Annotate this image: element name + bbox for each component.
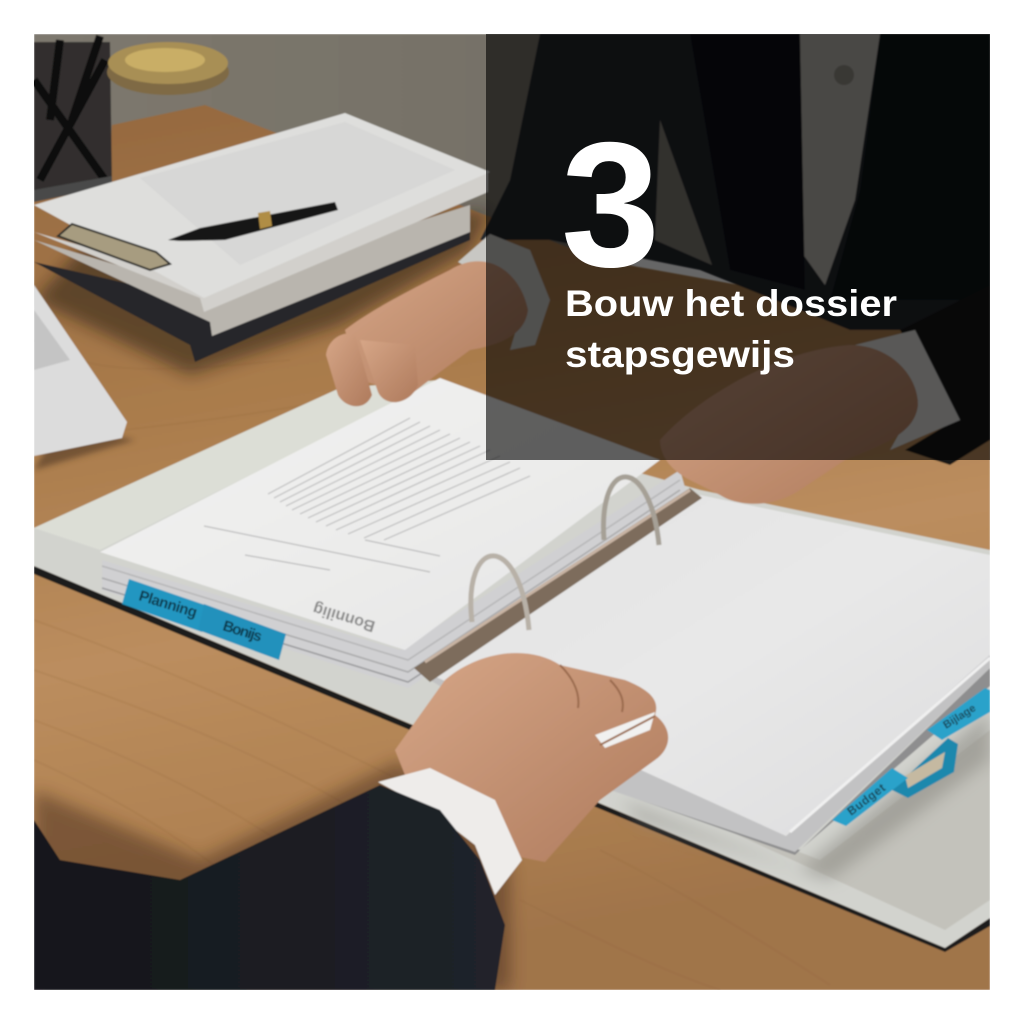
binder ring mechanism (414, 477, 702, 682)
wood grain (718, 990, 720, 991)
tab: Bewijs (198, 604, 286, 660)
lower hand (395, 653, 668, 862)
lower suit sleeve (34, 785, 505, 990)
icon: brass dish (107, 42, 229, 95)
dark overlay panel (486, 34, 990, 460)
tab: Budget (832, 738, 958, 826)
left page stack (100, 378, 690, 688)
tab: Planning (122, 579, 208, 632)
left upper hand (326, 261, 528, 406)
pen on documents (168, 202, 338, 241)
mirrored page word: Bonnilig (311, 599, 377, 634)
shirt cuff, left sleeve (458, 234, 550, 350)
background wall (34, 34, 570, 249)
suit torso, upper right (480, 34, 990, 350)
tab: right edge (927, 688, 990, 740)
page text lines (204, 418, 530, 572)
paper clip on documents (58, 224, 170, 270)
right sleeve (900, 328, 990, 466)
step number: 3 (561, 105, 660, 304)
right page stack (425, 495, 990, 855)
document stack on desk (34, 113, 490, 375)
shirt cuff, right sleeve (855, 330, 960, 450)
heading: stapsgewijs (565, 334, 795, 375)
lower shirt cuff (378, 768, 522, 895)
tab: Budget: Budget (844, 781, 888, 818)
laptop corner (34, 285, 135, 470)
tab: right edge: Bijlage (941, 702, 978, 732)
tab: Planning: Planning (137, 588, 199, 621)
icon: pen holder (34, 36, 112, 202)
binder (34, 380, 990, 952)
desk shadow under lower sleeve (34, 760, 510, 990)
tab: Bewijs: Bonijs (221, 618, 264, 646)
heading: Bouw het dossier (565, 283, 897, 324)
right hand (660, 345, 918, 504)
